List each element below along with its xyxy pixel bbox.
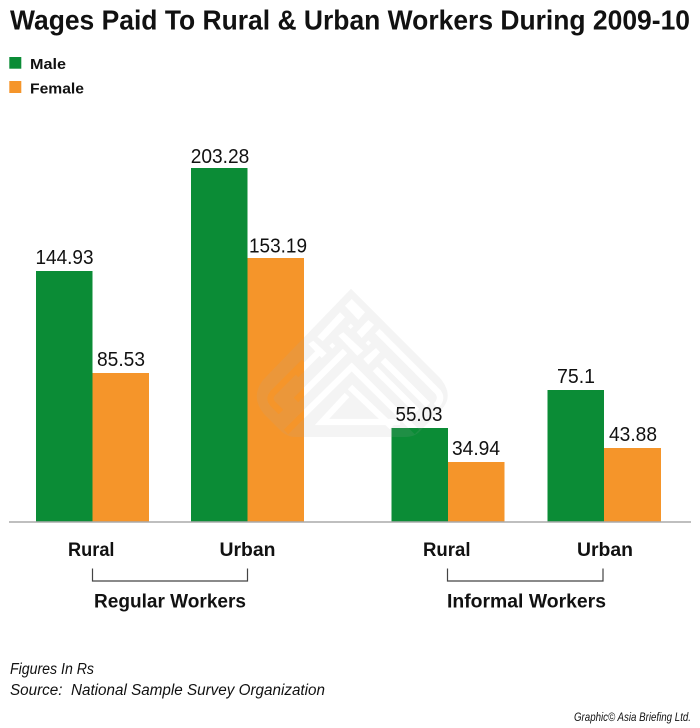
axis line — [9, 521, 691, 523]
title: Wages Paid To Rural & Urban Workers During 2009-10 — [10, 4, 690, 36]
informal urban female bar — [604, 448, 661, 522]
value labels: 43.88 — [609, 424, 657, 446]
footnote — [10, 661, 325, 699]
bar chart — [9, 168, 691, 522]
bracket: regular workers — [92, 568, 248, 581]
value labels: 144.93 — [36, 247, 94, 269]
bracket: informal workers — [448, 568, 603, 581]
group label: regular workers: Regular Workers — [94, 592, 246, 612]
group label: informal workers: Informal Workers — [447, 592, 606, 612]
value labels: 203.28 — [191, 146, 249, 168]
value labels: 75.1 — [557, 366, 595, 388]
regular urban female bar — [248, 258, 304, 522]
informal rural female bar — [448, 462, 504, 522]
category labels: Urban — [220, 540, 276, 561]
value labels: 85.53 — [97, 349, 145, 371]
legend: Female — [30, 80, 84, 98]
footnote: Figures In Rs — [10, 661, 94, 678]
value labels: 153.19 — [249, 236, 307, 258]
value labels: 34.94 — [452, 438, 500, 460]
regular rural female bar — [92, 373, 149, 522]
value labels — [36, 146, 657, 460]
footnote: Source: National Sample Survey Organization — [10, 682, 325, 699]
informal rural male bar — [392, 428, 448, 522]
regular rural male bar — [36, 271, 92, 522]
value labels: 55.03 — [396, 404, 442, 426]
regular urban male bar — [191, 168, 248, 522]
category labels: Urban — [577, 540, 633, 561]
category labels: Rural — [423, 540, 470, 561]
legend: Male — [30, 56, 66, 73]
informal urban male bar — [548, 390, 604, 522]
watermark logo — [257, 289, 448, 437]
legend — [9, 56, 84, 98]
category labels — [68, 540, 633, 561]
category labels: Rural — [68, 540, 114, 561]
